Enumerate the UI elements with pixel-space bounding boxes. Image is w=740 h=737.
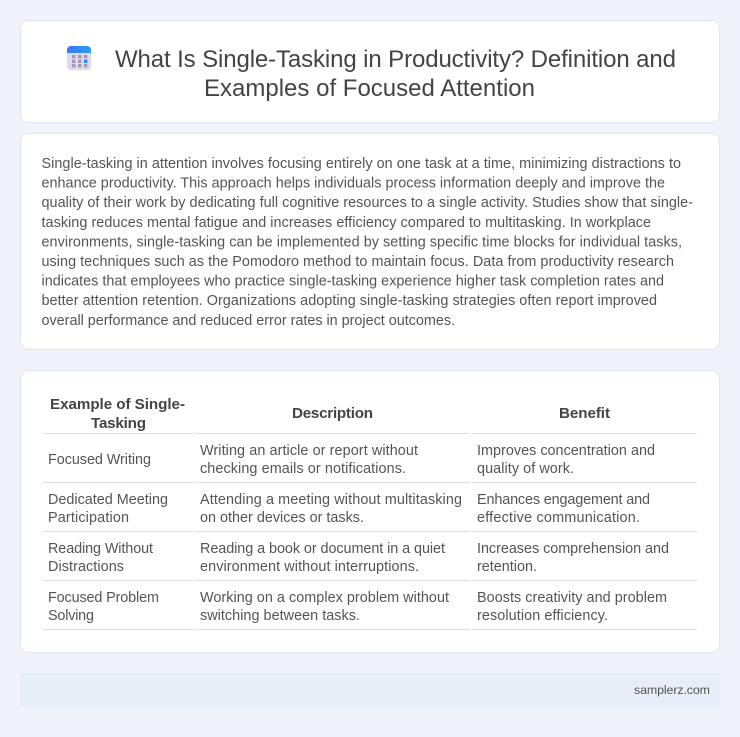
table row: focused problem solving: [48, 590, 667, 624]
table row: reading without distractions: [48, 541, 669, 575]
footer bar: [20, 673, 720, 707]
text block: definition: enhance productivity. This approach helps individuals process information deeply and improve the: [42, 176, 665, 192]
table header: Description: [292, 405, 373, 422]
icon: calendar: [67, 46, 91, 70]
footer source text: samplerz.com: [634, 683, 710, 697]
table row: focused writing: Writing an article or report without: [200, 443, 418, 459]
table row: focused writing: checking emails or notifications.: [200, 461, 406, 477]
text block: definition: using techniques such as the Pomodoro method to maintain focus. Data from productivity research: [42, 254, 674, 270]
table row: focused writing: quality of work.: [477, 461, 574, 477]
text block: definition: better attention retention. Organizations adopting single-tasking strategies often report improved: [42, 293, 657, 309]
table row: reading without distractions: Distractions: [48, 559, 124, 575]
table row: dedicated meeting participation: Attending a meeting without multitasking: [200, 492, 462, 508]
table row: reading without distractions: Reading Without: [48, 541, 153, 557]
table row: dedicated meeting participation: [48, 492, 650, 526]
table row: focused problem solving: switching between tasks.: [200, 608, 360, 624]
table row: focused problem solving: resolution efficiency.: [477, 608, 608, 624]
table row: focused problem solving: Boosts creativity and problem: [477, 590, 667, 606]
table header: Example of Single-: [50, 396, 185, 413]
table row: dedicated meeting participation: Dedicated Meeting: [48, 492, 168, 508]
table header: Tasking: [91, 415, 146, 432]
title: Examples of Focused Attention: [204, 75, 535, 102]
table row: focused problem solving: Focused Problem: [48, 590, 159, 606]
text block: definition: indicates that employees who practice single-tasking experience higher task completion rates and: [42, 274, 664, 290]
table row: reading without distractions: Reading a book or document in a quiet: [200, 541, 445, 557]
table row: focused writing: Focused Writing: [48, 452, 151, 468]
table row: dedicated meeting participation: on other devices or tasks.: [200, 510, 364, 526]
panel: header: [20, 20, 720, 122]
table row: reading without distractions: environment without interruptions.: [200, 559, 419, 575]
text block: definition: tasking reduces mental fatigue and increases efficiency compared to multitasking. In workplace: [42, 215, 651, 231]
table row: reading without distractions: Increases comprehension and: [477, 541, 669, 557]
table header: [50, 396, 610, 432]
panel: definition paragraph: [20, 134, 720, 350]
title: [115, 46, 676, 102]
table row: reading without distractions: retention.: [477, 559, 537, 575]
panel: examples table: [20, 370, 720, 652]
table header: Benefit: [559, 405, 610, 422]
table row: focused problem solving: Solving: [48, 608, 94, 624]
text block: definition: quality of their work by dedicating full cognitive resources to a single activity. Studies show that single-: [42, 195, 693, 211]
table row: focused writing: [48, 443, 655, 477]
text block: definition: environments, single-tasking can be implemented by setting specific time blocks for individual tasks,: [42, 234, 682, 250]
table row: focused writing: Improves concentration and: [477, 443, 655, 459]
table row: focused problem solving: Working on a complex problem without: [200, 590, 449, 606]
text block: definition: [42, 156, 693, 329]
table row: dedicated meeting participation: Participation: [48, 510, 129, 526]
title: What Is Single-Tasking in Productivity? Definition and: [115, 46, 676, 73]
table row: dedicated meeting participation: effective communication.: [477, 510, 640, 526]
table row: dedicated meeting participation: Enhances engagement and: [477, 492, 650, 508]
text block: definition: Single-tasking in attention involves focusing entirely on one task at a time, minimizing distractions to: [42, 156, 681, 172]
text block: definition: overall performance and reduced error rates in project outcomes.: [42, 313, 455, 329]
